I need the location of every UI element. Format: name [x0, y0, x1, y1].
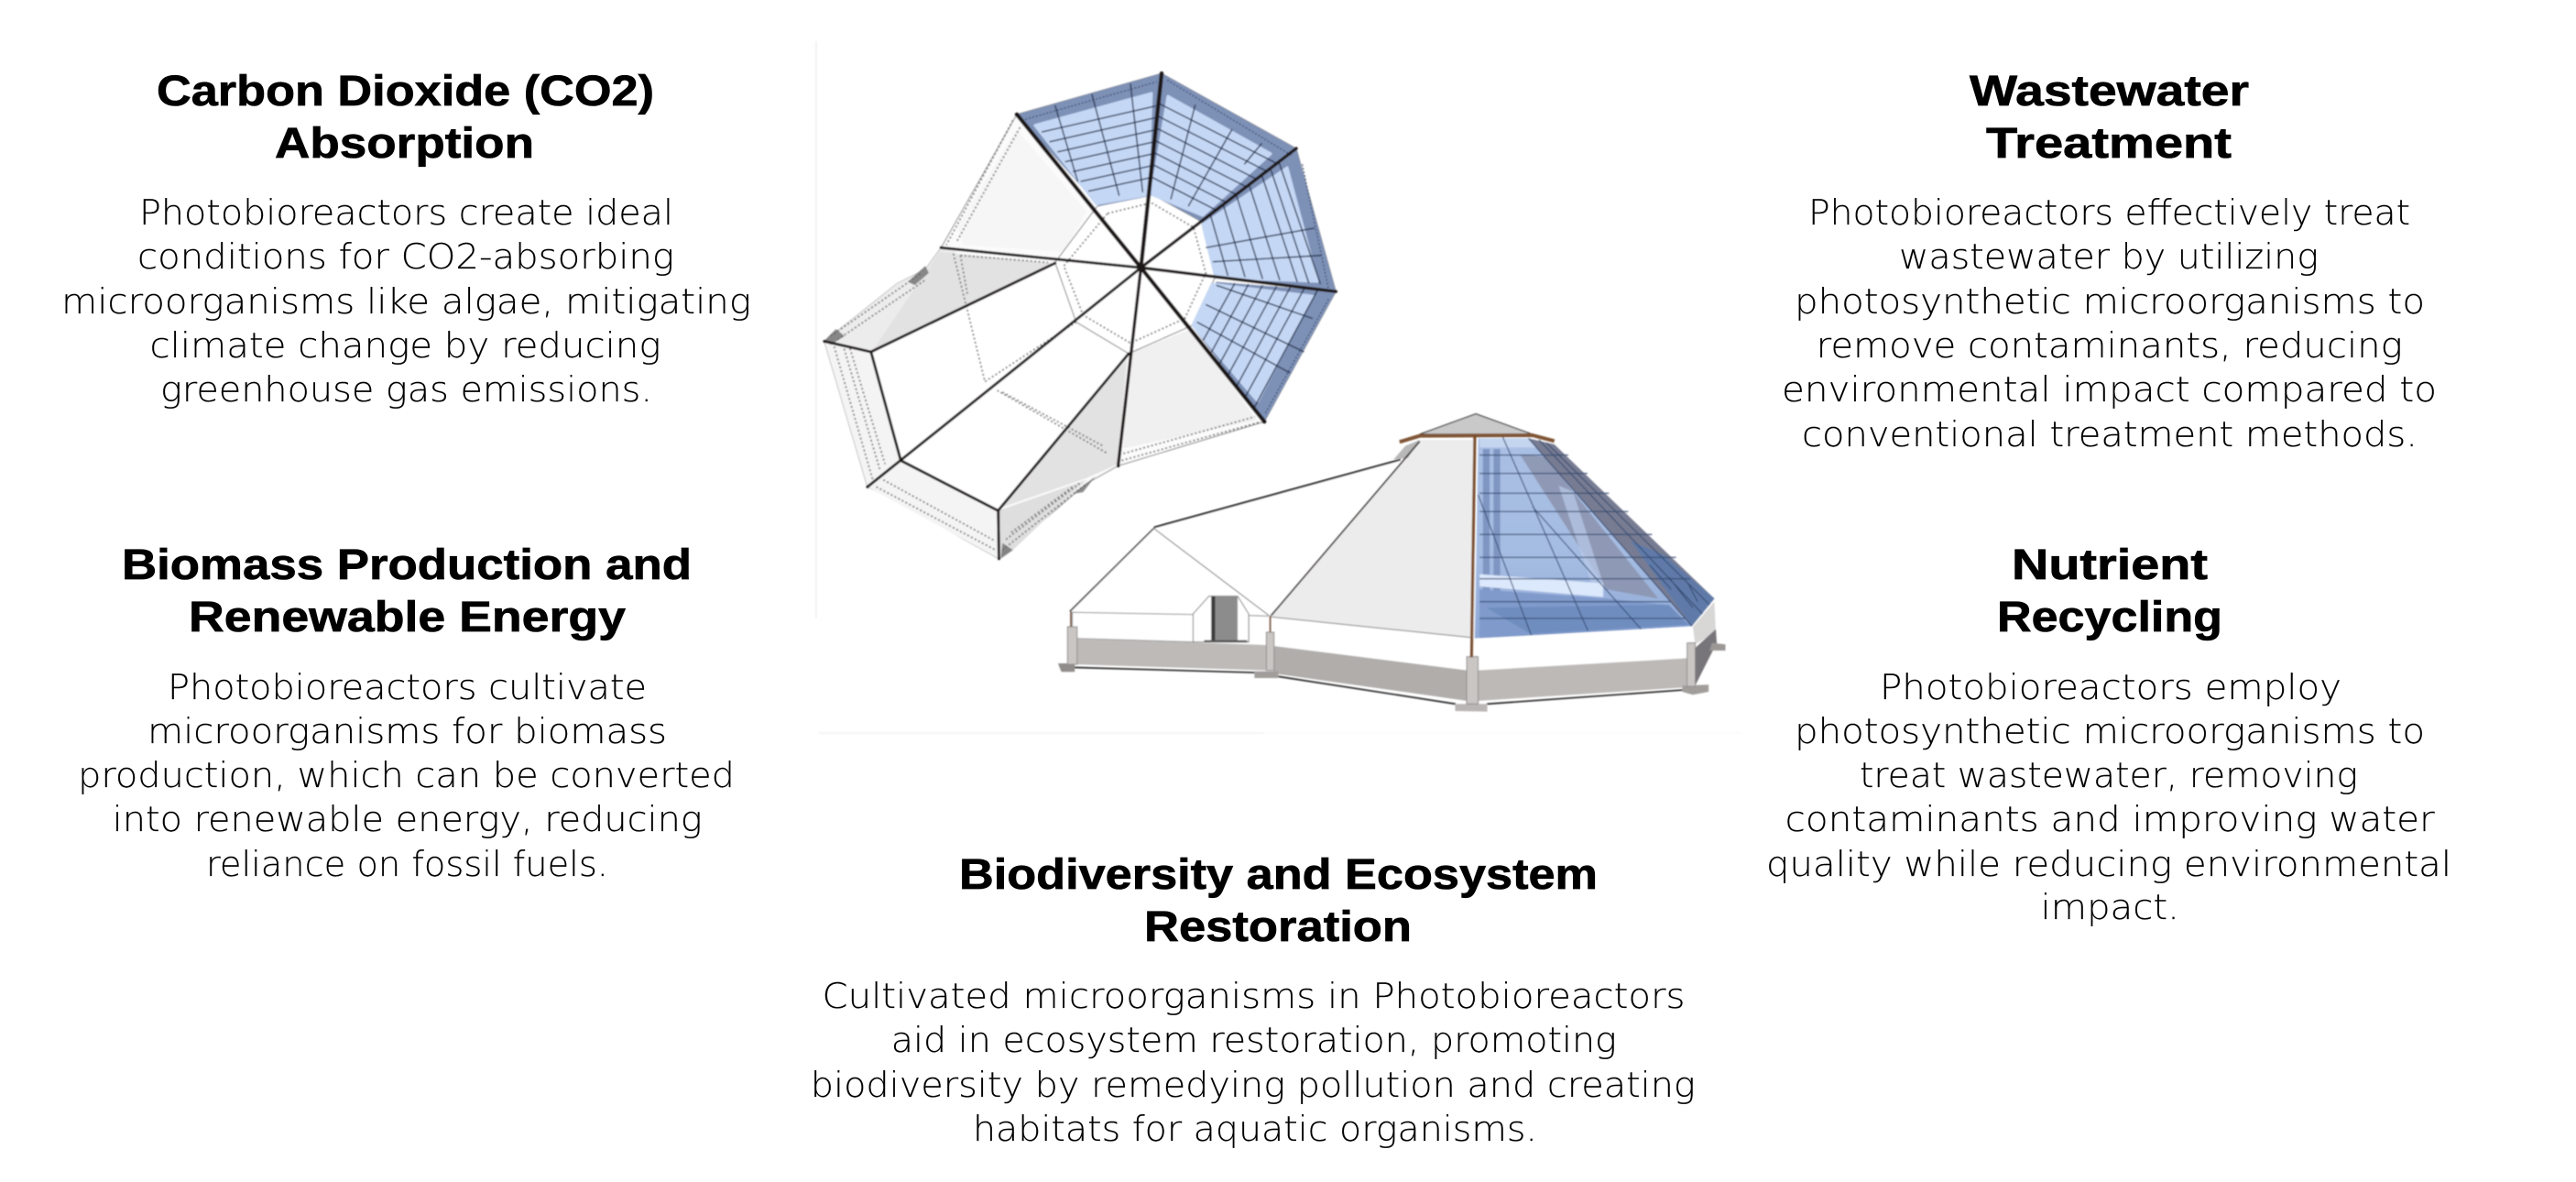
glass grid: [1479, 437, 1709, 635]
timber ring: [1400, 435, 1555, 442]
grey roof panels: [824, 129, 1257, 559]
text block: nutrient recycling: impact.: [2041, 887, 2179, 927]
text block: nutrient recycling: contaminants and improving water: [1785, 799, 2435, 839]
text block: biodiversity and ecosystem restoration: biodiversity by remedying pollution and creating: [811, 1065, 1696, 1105]
heading: carbon dioxide absorption: [157, 66, 654, 167]
text block: nutrient recycling: [1766, 667, 2451, 927]
entrance: [1193, 596, 1249, 642]
footing: [1058, 663, 1708, 712]
illustration: exterior perspective view: [1058, 414, 1725, 712]
base wall: middle: [1273, 646, 1468, 701]
text block: nutrient recycling: quality while reducing environmental: [1766, 844, 2451, 884]
dotted structural outlines: [831, 120, 1261, 550]
heading: wastewater treatment: Wastewater: [1970, 66, 2249, 115]
band detail lines: [1025, 80, 1328, 413]
white left roof: [1070, 440, 1420, 616]
panel: biomass production and renewable energy: [78, 540, 735, 884]
roof outline: [824, 73, 1336, 559]
illustration: photobioreactor building: [816, 41, 1741, 733]
heading: biomass production: Biomass Production and: [122, 540, 692, 588]
text block: biomass production: microorganisms for biomass: [147, 711, 667, 751]
text block: biodiversity and ecosystem restoration: habitats for aquatic organisms.: [973, 1109, 1537, 1149]
end wall: [1693, 602, 1725, 685]
heading: carbon dioxide absorption: Carbon Dioxide (CO2): [157, 66, 654, 115]
panel: nutrient recycling: [1766, 540, 2451, 927]
panel: wastewater treatment: [1782, 66, 2437, 454]
text block: biodiversity and ecosystem restoration: aid in ecosystem restoration, promoting: [891, 1020, 1617, 1060]
text block: wastewater treatment: Photobioreactors effectively treat: [1808, 192, 2410, 233]
illustration: roof plan view: [824, 73, 1336, 559]
heading: wastewater treatment: Treatment: [1986, 118, 2232, 167]
text block: biodiversity and ecosystem restoration: Cultivated microorganisms in Photobioreactors: [823, 976, 1686, 1016]
text block: carbon dioxide absorption: microorganisms like algae, mitigating: [61, 281, 751, 322]
glass highlights: [1479, 438, 1692, 639]
roof frame and spokes: [824, 73, 1336, 559]
heading: wastewater treatment: [1970, 66, 2249, 167]
text block: carbon dioxide absorption: [61, 192, 751, 410]
text block: biomass production: into renewable energy, reducing: [113, 799, 703, 839]
text block: carbon dioxide absorption: climate change by reducing: [150, 325, 661, 366]
text block: biomass production: [78, 667, 735, 884]
text block: wastewater treatment: environmental impact compared to: [1782, 369, 2437, 410]
text block: biomass production: reliance on fossil fuels.: [206, 844, 608, 884]
heading: biomass production: Renewable Energy: [189, 592, 626, 640]
glass roof face: [1475, 438, 1692, 639]
text block: nutrient recycling: treat wastewater, removing: [1860, 755, 2358, 795]
base wall: left: [1073, 639, 1266, 671]
clerestory walls: [1073, 612, 1194, 642]
heading: nutrient recycling: Recycling: [1997, 592, 2222, 640]
text block: nutrient recycling: photosynthetic microorganisms to: [1795, 711, 2425, 751]
roof cap: [1420, 414, 1533, 434]
text block: wastewater treatment: conventional treatment methods.: [1802, 414, 2418, 454]
heading: carbon dioxide absorption: Absorption: [275, 118, 534, 167]
upper connecting wedge: [1393, 440, 1420, 460]
shadowed roof edges: [825, 266, 1096, 559]
text block: carbon dioxide absorption: Photobioreactors create ideal: [139, 192, 673, 233]
text block: biodiversity and ecosystem restoration: [811, 976, 1696, 1149]
base wall: right: [1478, 658, 1688, 701]
heading: biodiversity and ecosystem restoration: Biodiversity and Ecosystem: [959, 849, 1598, 898]
timber pole and structural lines: [1070, 435, 1475, 657]
panel: biodiversity and ecosystem restoration: [811, 849, 1696, 1149]
text block: wastewater treatment: wastewater by utilizing: [1899, 236, 2319, 277]
text block: biomass production: production, which can be converted: [78, 755, 735, 795]
heading: biodiversity and ecosystem restoration: Restoration: [1144, 902, 1412, 950]
inner octagon: [1055, 194, 1217, 354]
heading: biomass production: [122, 540, 692, 640]
heading: nutrient recycling: Nutrient: [2012, 540, 2208, 588]
text block: nutrient recycling: Photobioreactors employ: [1880, 667, 2341, 707]
panel glazing grid: [1042, 83, 1322, 409]
text block: carbon dioxide absorption: greenhouse gas emissions.: [160, 369, 652, 410]
text block: wastewater treatment: photosynthetic microorganisms to: [1795, 281, 2425, 322]
blue panels: [1017, 73, 1336, 421]
text block: biomass production: Photobioreactors cultivate: [168, 667, 647, 707]
panel: carbon dioxide absorption: [61, 66, 751, 410]
heading: nutrient recycling: [1997, 540, 2222, 640]
text block: wastewater treatment: remove contaminants, reducing: [1817, 325, 2403, 366]
text block: wastewater treatment: [1782, 192, 2437, 454]
text block: carbon dioxide absorption: conditions for CO2-absorbing: [137, 236, 674, 277]
heading: biodiversity and ecosystem restoration: [959, 849, 1598, 950]
dark side of glass roof: [1529, 438, 1714, 626]
front roof face: [1272, 440, 1475, 639]
corner posts: [1067, 627, 1696, 704]
